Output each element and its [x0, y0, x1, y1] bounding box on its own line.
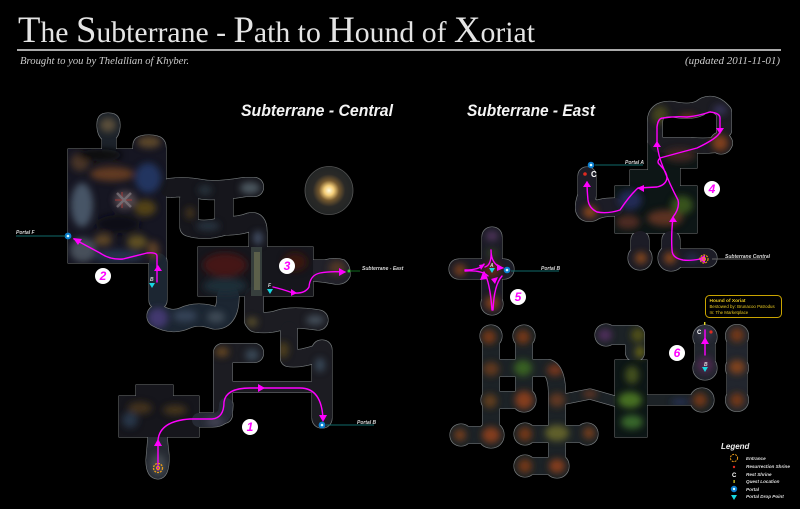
floor colouring: central	[70, 118, 345, 476]
legend item: rest shrine	[732, 472, 772, 479]
icon: portal B east	[504, 267, 510, 273]
icon: resurrection shrine	[583, 172, 587, 176]
step 3: 3	[284, 259, 291, 273]
legend title: Legend	[721, 442, 751, 451]
label: portal B east	[511, 266, 561, 272]
icon: drop point 6: B	[704, 362, 708, 368]
icon: rest shrine: C	[591, 170, 597, 179]
route 4	[583, 112, 724, 263]
route 3	[273, 268, 346, 296]
icon: entrance swirl	[154, 464, 162, 472]
step 4: 4	[708, 182, 716, 196]
icon: drop point A: A	[489, 263, 494, 269]
step 1	[242, 419, 258, 435]
route 1	[154, 384, 327, 470]
icon: exit marker	[348, 270, 350, 272]
step 2: 2	[99, 269, 107, 283]
step 1: 1	[247, 420, 254, 434]
icon: portal A	[588, 162, 594, 168]
step 2	[95, 268, 111, 284]
icon: portal F	[65, 233, 71, 239]
icon: drop point 6	[702, 362, 708, 372]
label: portal B: Portal B	[357, 420, 377, 426]
step 6: 6	[674, 346, 681, 360]
dungeon floor plan: east	[450, 104, 748, 478]
floor colouring: east	[454, 105, 745, 473]
step 3	[279, 258, 295, 274]
panel: Subterrane East map	[450, 104, 771, 478]
update date: (updated 2011-11-01)	[685, 55, 780, 67]
label: portal B	[326, 420, 377, 426]
label: Subterrane East exit: Subterrane - East	[362, 266, 404, 272]
heading: Subterrane Central: Subterrane - Central	[241, 101, 394, 120]
legend item: portal: Portal	[746, 487, 760, 492]
label: Subterrane Central: Subterrane Central	[725, 254, 771, 260]
emblem in large hall	[115, 192, 132, 208]
icon: rest and resurrection shrines, room 6	[697, 330, 713, 336]
step 4	[704, 181, 720, 197]
label: portal F	[16, 230, 66, 236]
legend item: resurrection shrine: Resurrection Shrine	[746, 464, 790, 469]
route 2	[73, 238, 162, 282]
icon: drop point B	[149, 277, 155, 288]
legend item: rest shrine: Rest Shrine	[746, 472, 772, 477]
legend item: rest shrine: C	[732, 473, 737, 479]
header rule	[17, 49, 781, 51]
callout: Hound of Xoriat: Hound of Xoriat	[710, 298, 746, 304]
icon: drop point F	[267, 283, 273, 294]
dungeon floor plan: central	[68, 113, 350, 479]
legend item: entrance: Entrance	[746, 456, 766, 461]
credit line: Brought to you by Thelallian of Khyber.	[20, 55, 189, 67]
label: portal B east: Portal B	[541, 266, 561, 272]
step 6	[669, 345, 685, 361]
icon: drop point F: F	[268, 283, 272, 289]
route 5	[465, 250, 504, 310]
legend item: portal drop point: Portal Drop Point	[746, 494, 784, 499]
icon: quest location	[704, 322, 705, 325]
label: portal A: Portal A	[625, 160, 644, 166]
callout: Hound of Xoriat: Bestowed by: Brunacoo Patrodus	[710, 304, 775, 309]
icon: portal B	[319, 422, 325, 428]
legend	[721, 442, 790, 500]
icon: glowing sun orb	[305, 166, 353, 214]
callout: Hound of Xoriat	[706, 296, 782, 318]
step 5	[510, 289, 526, 305]
label: portal A	[595, 160, 644, 166]
heading: Subterrane East: Subterrane - East	[467, 101, 596, 120]
step 5: 5	[515, 290, 522, 304]
legend item: quest location: Quest Location	[746, 479, 780, 484]
icon: drop point B: B	[150, 277, 154, 283]
title: The Subterrane - Path to Hound of Xoriat	[18, 10, 536, 51]
route 6	[701, 330, 709, 355]
label: portal F: Portal F	[16, 230, 36, 236]
icon: rest and resurrection shrines, room 6: C	[697, 330, 702, 336]
panel: Subterrane Central map	[16, 113, 404, 479]
icon: drop point A	[489, 263, 495, 273]
callout: Hound of Xoriat: In: The Marketplace	[710, 310, 749, 315]
icon: entrance swirl	[700, 255, 708, 263]
